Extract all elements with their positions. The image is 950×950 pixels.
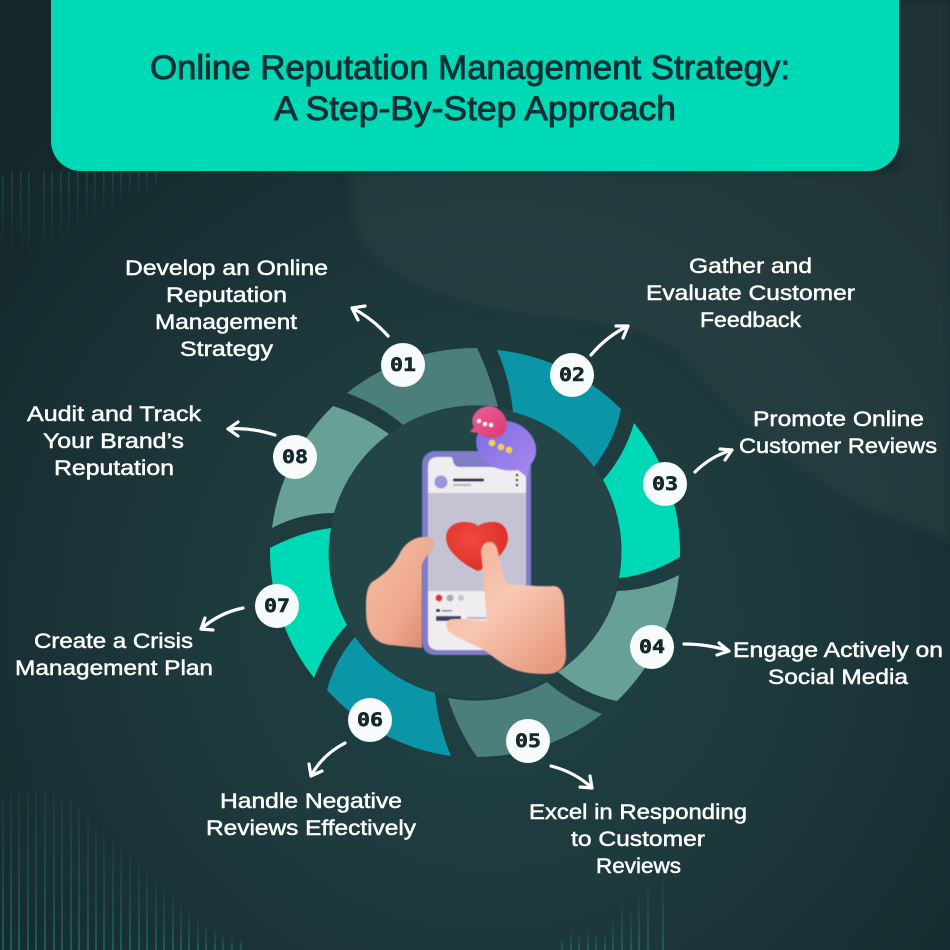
badge 06 — [348, 698, 392, 742]
label 08 — [27, 402, 201, 480]
arrow 02 — [591, 326, 628, 355]
label 08: Reputation — [54, 456, 174, 480]
label 05: to Customer — [571, 827, 705, 851]
badge 04: 04 — [639, 636, 665, 658]
background brain silhouette — [351, 0, 950, 540]
label 02: Feedback — [700, 308, 801, 332]
arrow 07 — [201, 608, 243, 630]
badge 06: 06 — [357, 709, 383, 731]
title text: A Step-By-Step Approach — [274, 90, 676, 128]
title text — [150, 49, 790, 128]
step 03 — [643, 407, 937, 506]
label 05 — [529, 800, 747, 878]
step 05 — [506, 719, 747, 878]
arrow 01 — [352, 306, 388, 336]
step 01 — [125, 256, 425, 387]
arrow 03 — [695, 449, 732, 472]
label 04: Social Media — [768, 665, 908, 689]
label 04 — [733, 638, 943, 689]
label 01: Management — [155, 310, 297, 334]
segment 01 — [347, 348, 498, 425]
label 02: Gather and — [689, 254, 812, 278]
label 05: Excel in Responding — [529, 800, 747, 824]
badge 04 — [630, 625, 674, 669]
segment 06 — [327, 637, 451, 756]
badge 08: 08 — [282, 446, 308, 468]
label 06 — [206, 789, 416, 840]
label 03 — [739, 407, 937, 458]
chat bubble purple — [476, 421, 536, 477]
title banner — [51, 0, 899, 171]
badge 07 — [255, 584, 299, 628]
step 04 — [630, 625, 943, 689]
label 01: Strategy — [180, 337, 273, 361]
label 06: Handle Negative — [220, 789, 402, 813]
step 02 — [550, 254, 855, 397]
ring diagram — [270, 348, 680, 757]
label 02: Evaluate Customer — [646, 281, 855, 305]
segment 08 — [272, 406, 389, 528]
segment 03 — [603, 423, 680, 578]
badge 08 — [273, 435, 317, 479]
label 01: Develop an Online — [125, 256, 328, 280]
arrow 08 — [228, 422, 275, 436]
label 07: Management Plan — [15, 656, 213, 680]
label 01: Reputation — [166, 283, 287, 307]
label 05: Reviews — [596, 854, 681, 878]
arrow 06 — [309, 743, 345, 776]
left hand — [366, 537, 434, 648]
badge 03 — [643, 462, 687, 506]
badge 02: 02 — [559, 364, 585, 386]
label 02 — [646, 254, 855, 332]
phone and hands illustration — [366, 406, 566, 674]
badge 01: 01 — [390, 354, 416, 376]
label 04: Engage Actively on — [733, 638, 943, 662]
label 08: Audit and Track — [27, 402, 201, 426]
step 08 — [27, 402, 317, 480]
label 06: Reviews Effectively — [206, 816, 416, 840]
segment 04 — [558, 575, 679, 701]
segment 07 — [270, 528, 347, 678]
phone — [422, 451, 531, 655]
title text: Online Reputation Management Strategy: — [150, 49, 790, 87]
badge 05 — [506, 719, 550, 763]
step 06 — [206, 698, 416, 840]
badge 02 — [550, 353, 594, 397]
segment 02 — [497, 350, 621, 467]
label 03: Customer Reviews — [739, 434, 937, 458]
label 08: Your Brand’s — [43, 429, 184, 453]
label 01 — [125, 256, 328, 361]
label 07: Create a Crisis — [34, 629, 193, 653]
segment 05 — [448, 682, 602, 757]
chat bubble pink — [470, 406, 507, 438]
arrow 04 — [684, 643, 729, 655]
badge 05: 05 — [515, 730, 541, 752]
right hand — [446, 542, 566, 674]
badge 07: 07 — [264, 595, 290, 617]
badge 01 — [381, 343, 425, 387]
heart — [446, 522, 508, 571]
step 07 — [15, 584, 299, 680]
arrow 05 — [551, 766, 592, 788]
badge 03: 03 — [652, 473, 678, 495]
label 07 — [15, 629, 213, 680]
label 03: Promote Online — [753, 407, 924, 431]
